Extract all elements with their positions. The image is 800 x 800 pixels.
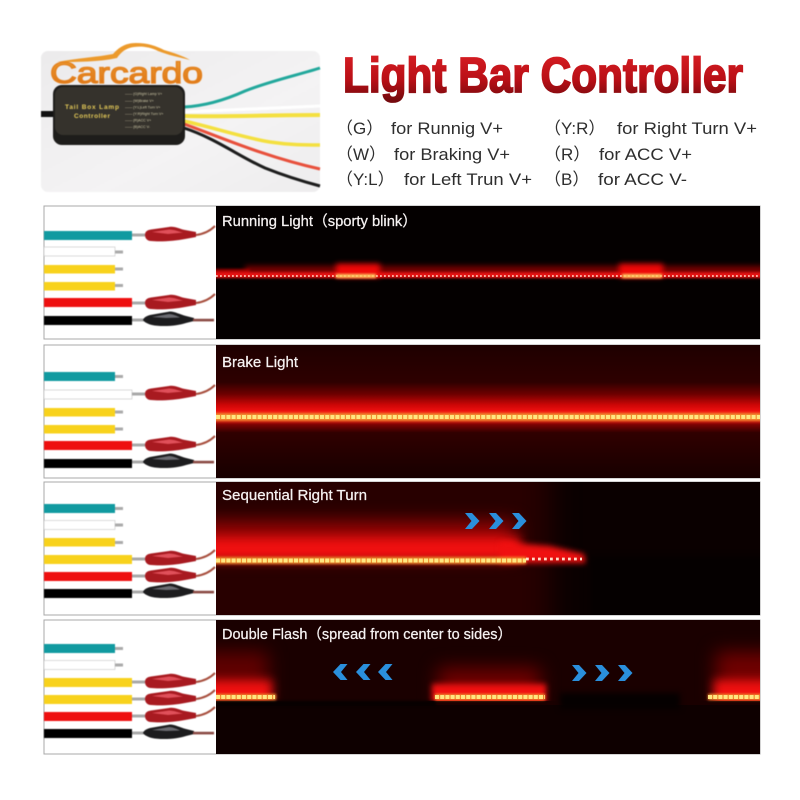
legend: yellow right: for Right Turn V+ bbox=[617, 119, 757, 138]
caption: Sequential Right Turn bbox=[222, 487, 367, 504]
legend: red bbox=[544, 145, 692, 164]
wire: yellow upper bbox=[184, 115, 320, 116]
legend: red: for ACC V+ bbox=[599, 145, 692, 164]
legend: green: for Runnig V+ bbox=[391, 119, 503, 138]
caption: Running Light（sporty blink） bbox=[222, 213, 417, 230]
legend: green: （G） bbox=[336, 119, 383, 138]
panel: double flash bbox=[44, 620, 786, 754]
caption: Double Flash（spread from center to sides） bbox=[222, 626, 512, 643]
icon: power cable bbox=[41, 111, 55, 117]
wire: teal bbox=[184, 68, 320, 107]
arrows: moving right bbox=[465, 513, 526, 529]
wire: black bbox=[184, 128, 320, 186]
legend: red: （R） bbox=[544, 145, 590, 164]
logo: Carcardo: Carcardo bbox=[50, 57, 203, 90]
legend: green bbox=[336, 119, 503, 138]
wiring diagram bbox=[44, 644, 215, 739]
legend: yellow right bbox=[544, 119, 757, 138]
legend: white bbox=[336, 145, 510, 164]
wire colour legend bbox=[336, 119, 757, 189]
legend: yellow left: （Y:L） bbox=[336, 170, 395, 189]
controller label: Tail Box Lamp bbox=[65, 104, 119, 111]
legend: yellow left: for Left Trun V+ bbox=[404, 170, 532, 189]
controller wire list: —— (W)Brake V+ bbox=[125, 99, 154, 103]
wire: white bbox=[184, 106, 320, 112]
wire: red bbox=[184, 124, 320, 169]
panel: brake light bbox=[44, 345, 780, 478]
wire: yellow lower bbox=[184, 121, 320, 145]
wiring diagram bbox=[44, 226, 215, 326]
logo: Carcardo bbox=[50, 43, 203, 90]
legend: black: for ACC V- bbox=[598, 170, 687, 189]
controller box bbox=[53, 85, 185, 145]
arrows: moving right bbox=[572, 665, 632, 681]
arrows: moving left bbox=[333, 664, 392, 680]
controller label line two: Controller bbox=[74, 113, 110, 120]
wiring diagram bbox=[44, 504, 215, 598]
panel: running light bbox=[44, 206, 775, 339]
legend: black bbox=[544, 170, 687, 189]
controller wire list: —— (B)ACC V- bbox=[125, 125, 151, 129]
legend: yellow right: （Y:R） bbox=[544, 119, 605, 138]
panel: sequential right turn bbox=[43, 482, 760, 616]
legend: white: for Braking V+ bbox=[394, 145, 510, 164]
controller wire list bbox=[125, 92, 163, 129]
light strip photo bbox=[200, 345, 780, 478]
light strip photo bbox=[216, 482, 760, 615]
caption: Brake Light bbox=[222, 354, 299, 371]
legend: yellow left bbox=[336, 170, 532, 189]
light strip photo bbox=[200, 206, 775, 339]
controller wire list: —— (Y:R)Right Turn V+ bbox=[125, 112, 163, 116]
product photo: controller with wires bbox=[41, 43, 320, 192]
controller wire list: —— (G)Right Lamp V+ bbox=[125, 92, 162, 96]
controller wire list: —— (R)ACC V+ bbox=[125, 118, 151, 122]
legend: black: （B） bbox=[544, 170, 589, 189]
legend: white: （W） bbox=[336, 145, 386, 164]
title: Light Bar Controller bbox=[343, 49, 743, 103]
light strip photo bbox=[190, 620, 786, 754]
wiring diagram bbox=[44, 372, 215, 468]
controller wire list: —— (Y:L)Left Turn V+ bbox=[125, 106, 160, 110]
